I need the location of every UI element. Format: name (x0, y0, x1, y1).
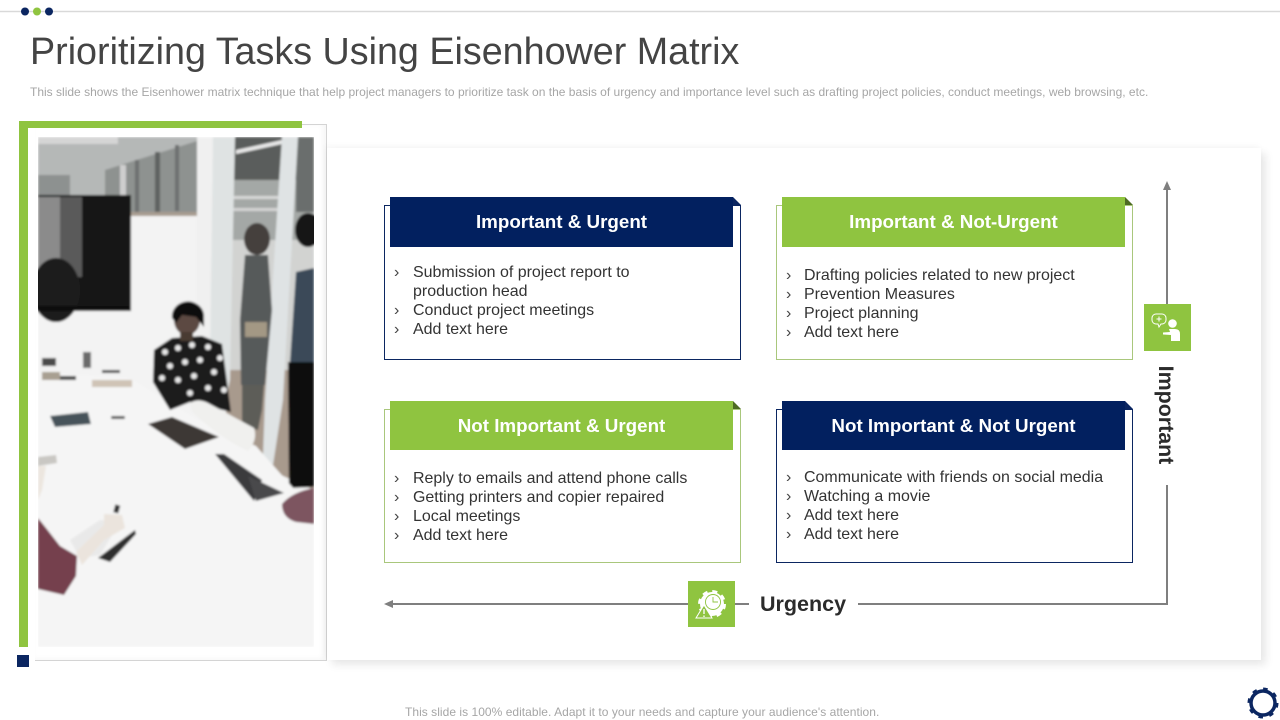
white chair (190, 400, 255, 451)
fold (1125, 401, 1133, 409)
list: Add text here (413, 527, 508, 544)
top decorative rule with dots (0, 8, 1280, 16)
list: Submission of project report to (413, 264, 630, 281)
heading: Important & Urgent (476, 211, 647, 232)
list (786, 469, 1104, 543)
subtitle: This slide shows the Eisenhower matrix technique that help project managers to prioritize task on the basis of urgency and importance level such as drafting project policies, conduct meetings, web browsing, etc. (30, 85, 1148, 99)
list: Drafting policies related to new project (804, 267, 1075, 284)
footer note: This slide is 100% editable. Adapt it to your needs and capture your audience's attention. (405, 705, 879, 719)
list: Reply to emails and attend phone calls (413, 470, 687, 487)
door frames (210, 137, 235, 400)
list: Add text here (413, 321, 508, 338)
tablet (148, 417, 219, 449)
heading: Not Important & Not Urgent (831, 415, 1076, 436)
axis arrows (384, 181, 1171, 608)
stool (282, 488, 314, 524)
desk clutter (42, 352, 120, 380)
photo frame (17, 121, 327, 667)
icon: settings gear (1248, 688, 1278, 718)
desk surface (38, 372, 314, 647)
fold (733, 401, 741, 409)
thin frame outline (35, 124, 327, 661)
list: Local meetings (413, 508, 520, 525)
card outline (776, 409, 1133, 563)
title: Prioritizing Tasks Using Eisenhower Matrix (30, 30, 739, 72)
right woman (295, 213, 321, 247)
reflected figure (244, 223, 270, 255)
list: Getting printers and copier repaired (413, 489, 664, 506)
office wall and window (38, 137, 198, 195)
card outline (384, 205, 741, 360)
navy square (17, 655, 29, 667)
heading (390, 197, 733, 247)
card outline (384, 409, 741, 563)
writing arm and notebook (70, 520, 120, 558)
list: Add text here (804, 507, 899, 524)
label: Urgency: Urgency (760, 592, 846, 616)
fold (733, 197, 741, 205)
list: Project planning (804, 305, 919, 322)
icon: gear with clock and warning (688, 581, 735, 627)
heading: Important & Not-Urgent (849, 211, 1058, 232)
card outline (776, 205, 1133, 360)
notebook (50, 412, 91, 427)
heading (782, 401, 1125, 450)
fold (1125, 197, 1133, 205)
green bracket (19, 121, 302, 647)
quadrant: Important & Urgent (384, 197, 741, 360)
photo: meeting room (38, 137, 314, 646)
main panel (327, 148, 1261, 660)
laptop (215, 454, 262, 501)
list: Communicate with friends on social media (804, 469, 1103, 486)
heading: Not Important & Urgent (458, 415, 665, 436)
heading (390, 401, 733, 450)
list (394, 470, 687, 544)
list: Watching a movie (804, 488, 930, 505)
seated woman (153, 336, 231, 412)
TV (38, 195, 131, 311)
list: production head (413, 283, 528, 300)
quadrant: Not Important & Not Urgent (776, 401, 1133, 563)
icon: person with speech bubble (1144, 304, 1191, 351)
left hand with phone (38, 455, 57, 466)
list (786, 267, 1075, 341)
list (394, 264, 630, 338)
glass door background (230, 137, 314, 180)
list: Add text here (804, 324, 899, 341)
label: Important: Important (1154, 366, 1178, 464)
small phone (111, 416, 125, 419)
quadrant: Important & Not-Urgent (776, 197, 1133, 360)
quadrant: Not Important & Urgent (384, 401, 741, 563)
list: Add text here (804, 526, 899, 543)
list: Conduct project meetings (413, 302, 594, 319)
list: Prevention Measures (804, 286, 955, 303)
heading (782, 197, 1125, 247)
